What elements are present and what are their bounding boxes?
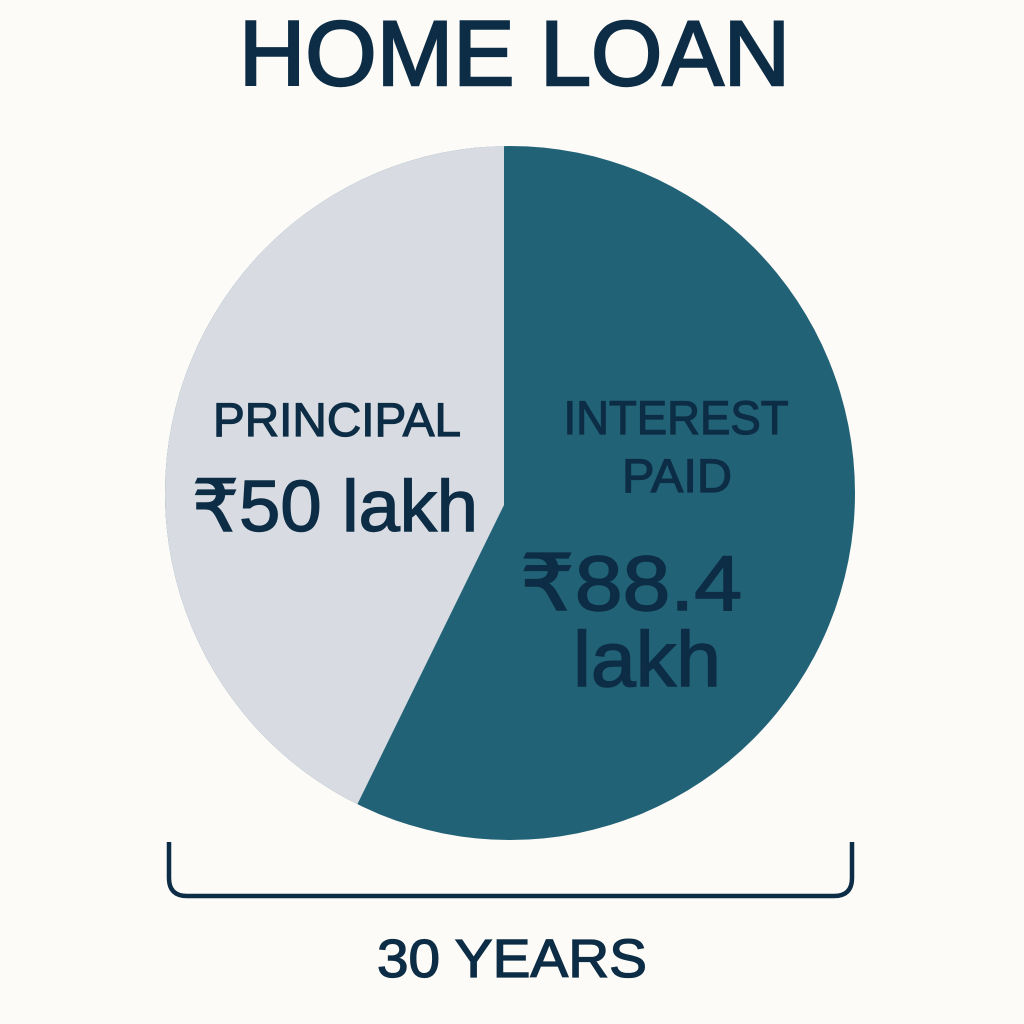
label: interest paid (520, 391, 788, 703)
pie slice: interest paid (165, 146, 855, 840)
label: principal (192, 393, 478, 547)
label: interest paid: PAID (622, 449, 732, 502)
pie slice: principal (165, 146, 504, 804)
label: interest paid: ₹88.4 (520, 539, 742, 627)
label: principal: PRINCIPAL (213, 393, 461, 446)
label: duration: 30 YEARS (377, 929, 647, 989)
bracket (169, 842, 852, 896)
title: HOME LOAN (239, 3, 790, 105)
label: interest paid: INTEREST (564, 391, 788, 444)
label: interest paid: lakh (573, 615, 721, 703)
label: principal: ₹50 lakh (192, 467, 478, 547)
pie chart (165, 146, 855, 840)
